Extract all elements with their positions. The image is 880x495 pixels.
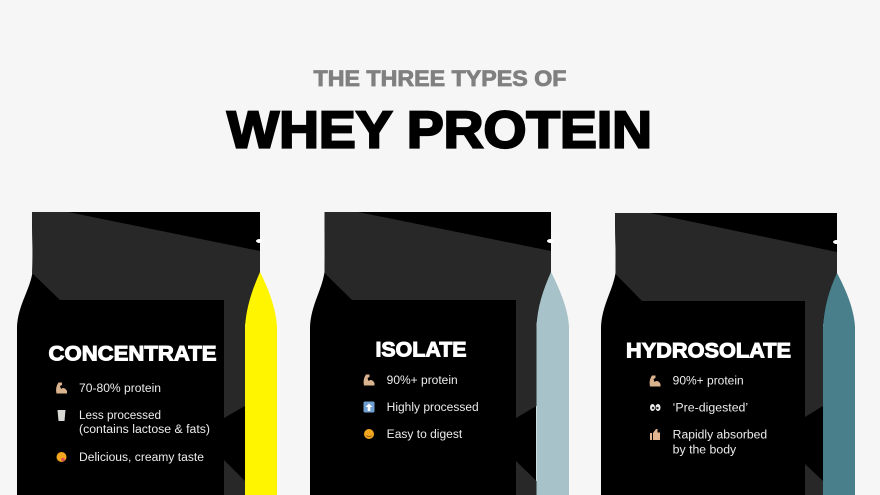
bag tear notch [547, 239, 554, 243]
heading: hydrosolate: HYDROSOLATE [626, 340, 791, 362]
icon: yum face [56, 452, 66, 462]
panel: concentrate bag [17, 212, 277, 495]
icon: flexed arm [364, 374, 374, 386]
bag body [601, 213, 837, 495]
icon: glass of milk [58, 410, 66, 421]
icon: eyes [650, 404, 660, 411]
colour strip: teal [823, 273, 855, 495]
title: the three types of: THE THREE TYPES OF [314, 66, 566, 91]
text: by the body: by the body [673, 445, 736, 457]
panel: hydrosolate bag [601, 213, 855, 495]
colour strip: pale blue [536, 272, 569, 495]
heading: isolate: ISOLATE [376, 338, 466, 362]
bag shading [615, 213, 837, 495]
icon: flexed arm [650, 376, 660, 386]
icon: up arrow button [364, 402, 374, 412]
icon: flexed arm [56, 382, 67, 394]
text: delicious taste: Delicious, creamy taste [79, 452, 204, 464]
bag tear notch [833, 240, 840, 244]
text: contains lactose and fats: (contains lactose & fats) [79, 424, 210, 436]
panel: isolate bag [310, 212, 569, 495]
text: easy to digest: Easy to digest [387, 429, 463, 441]
text: pre-digested: ‘Pre-digested’ [673, 403, 748, 415]
bag shading [324, 212, 551, 495]
bag tear notch [256, 239, 263, 243]
icon: thumbs up [650, 429, 660, 440]
colour strip: yellow [245, 272, 277, 495]
title: whey protein: WHEY PROTEIN [227, 102, 652, 160]
bag body [17, 212, 260, 495]
icon: smiling face [364, 429, 374, 439]
text: less processed: Less processed [79, 410, 161, 422]
text: protein level: 90%+ protein [673, 376, 744, 388]
text: protein level: 90%+ protein [387, 375, 458, 387]
heading: concentrate: CONCENTRATE [48, 342, 216, 366]
text: highly processed: Highly processed [387, 402, 479, 414]
bag body [310, 212, 551, 495]
bag shading [32, 212, 260, 495]
text: rapidly absorbed: Rapidly absorbed [673, 430, 767, 442]
text: protein range: 70-80% protein [79, 383, 161, 395]
